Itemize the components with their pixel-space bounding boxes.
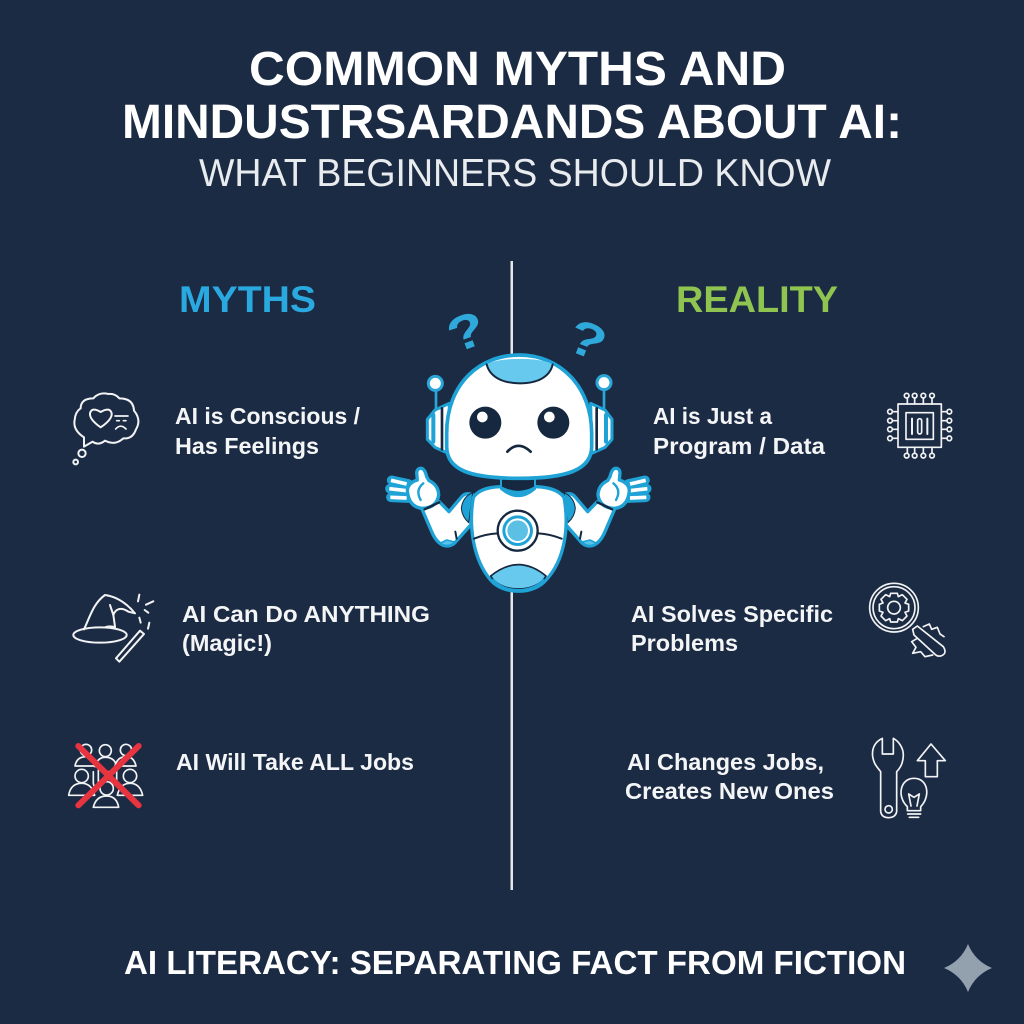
icon: crossed-out workers xyxy=(69,744,143,807)
title: WHAT BEGINNERS SHOULD KNOW xyxy=(199,152,832,195)
icon: microchip xyxy=(888,393,952,458)
robot right arm xyxy=(563,493,615,546)
text: AI will take all jobs: AI Will Take ALL Jobs xyxy=(176,749,414,775)
text: AI is conscious: AI is Conscious / xyxy=(175,403,360,429)
text: AI changes jobs xyxy=(625,749,834,804)
icon: question marks xyxy=(440,300,615,372)
text: AI can do anything: (Magic!) xyxy=(182,630,272,656)
robot right hand xyxy=(597,468,647,509)
robot antennas and ears xyxy=(427,376,612,453)
icon: sparkle star xyxy=(944,944,992,992)
text: AI solves specific problems xyxy=(631,601,833,656)
title: COMMON MYTHS AND xyxy=(249,42,786,96)
heading: myths: MYTHS xyxy=(179,279,316,320)
robot chest core xyxy=(498,511,538,551)
text: AI is just a program: AI is Just a xyxy=(653,403,773,429)
robot left arm xyxy=(422,493,473,546)
text: AI can do anything xyxy=(182,601,430,656)
heading: reality: REALITY xyxy=(676,279,838,320)
robot neck xyxy=(500,477,536,497)
robot head xyxy=(447,355,592,478)
text: AI changes jobs: AI Changes Jobs, xyxy=(627,749,824,775)
icon: thought bubble with heart and sad face xyxy=(73,393,138,464)
text: AI is conscious: Has Feelings xyxy=(175,433,319,459)
icon: wizard hat and wand xyxy=(73,595,153,662)
icon: question marks: ? xyxy=(440,300,493,364)
text: AI is just a program xyxy=(653,403,826,459)
title: MINDUSTRSARDANDS ABOUT AI: xyxy=(122,95,902,149)
robot illustration xyxy=(389,300,647,591)
text: AI solves specific problems: Problems xyxy=(631,630,738,656)
text: AI changes jobs: Creates New Ones xyxy=(625,778,834,804)
robot body xyxy=(471,487,566,591)
text: AI solves specific problems: AI Solves Specific xyxy=(631,601,833,627)
footer tagline: AI LITERACY: SEPARATING FACT FROM FICTION xyxy=(124,944,906,981)
text: AI is just a program: Program / Data xyxy=(653,433,826,459)
icon: wrench, lightbulb and arrow xyxy=(872,738,945,818)
title xyxy=(122,42,902,195)
text: AI is conscious xyxy=(175,403,360,459)
icon: magnifier with gear xyxy=(870,583,945,657)
icon: question marks: ? xyxy=(560,307,615,372)
text: AI can do anything: AI Can Do ANYTHING xyxy=(182,601,430,627)
robot left hand xyxy=(389,468,439,509)
